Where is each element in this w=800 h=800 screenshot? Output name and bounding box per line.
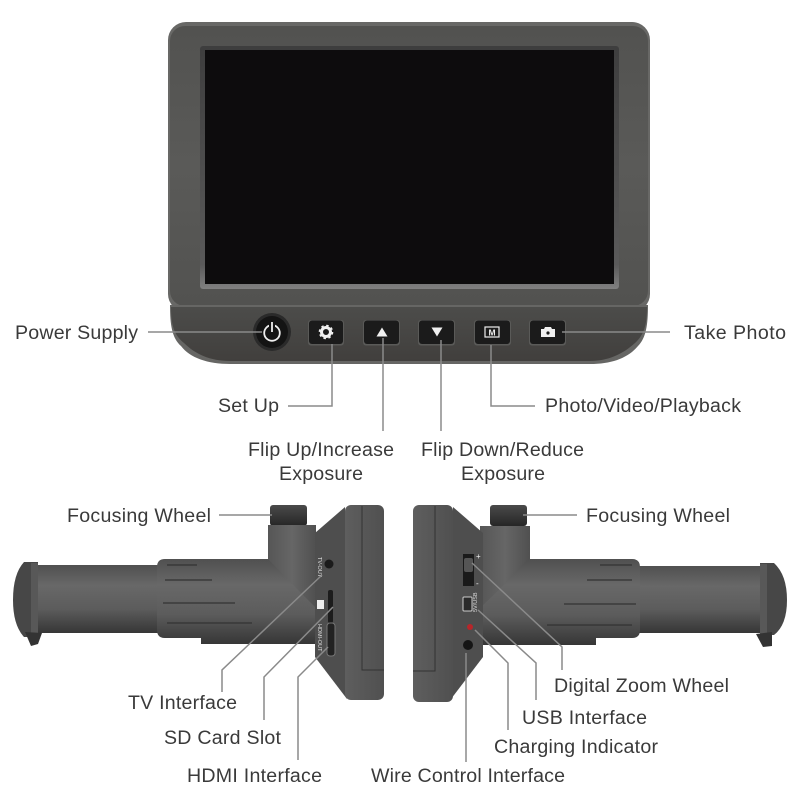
label: Charging Indicator: Charging Indicator [494,736,658,758]
minus sign: - [476,579,479,588]
HDMI port [327,623,335,656]
label: right Focusing Wheel: Focusing Wheel [586,505,730,527]
label: TV Interface: TV Interface [128,692,237,714]
cap rim highlight [760,564,767,634]
screen housing [413,505,453,702]
up button [363,320,400,346]
barrel grooves [547,565,636,625]
zoom wheel thumb [464,558,473,572]
charging indicator [467,624,473,630]
lower button panel [171,307,647,361]
power button [253,313,291,351]
USB label: 5V/USB [473,592,479,612]
cap latch [25,632,42,646]
label: HDMI Interface: HDMI Interface [187,765,322,787]
cap latch [756,632,772,647]
barrel and elbow [480,559,640,645]
screen surround [200,46,619,289]
label: Flip Down/Reduce Exposure: Flip Down/Reduce [421,439,584,461]
SD slot [328,590,333,623]
wedge back panel [315,507,347,699]
label: Photo/Video/Playback: Photo/Video/Playback [545,395,741,417]
tube [36,565,161,633]
housing seam [362,506,384,670]
monitor outer rim [168,22,650,312]
HDMI label: HDMI-OUT [316,624,322,652]
leader lines [148,332,670,762]
label: Power Supply: Power Supply [15,322,138,344]
mode button: M [488,328,496,338]
right side device view [413,505,787,702]
screen [205,50,614,284]
label: Flip Up/Increase Exposure: Flip Up/Increase [248,439,394,461]
barrel and elbow [157,559,316,644]
label: Wire Control Interface: Wire Control Interface [371,765,565,787]
label: USB Interface: USB Interface [522,707,647,729]
label: Flip Up/Increase Exposure: Exposure [279,463,363,485]
USB port [463,597,472,611]
housing seam [413,506,435,671]
zoom wheel slot [463,554,474,586]
SD icon [317,600,324,609]
settings button [308,320,344,346]
neck [480,526,530,610]
focusing wheel [490,505,527,526]
tube [638,566,762,633]
wedge back panel [451,507,483,699]
monitor bezel [170,26,648,306]
label: Flip Up/Increase Exposure [248,439,394,485]
TV port [324,560,334,568]
camera button [529,320,566,346]
lens cap [760,563,787,635]
plus sign: + [476,552,481,561]
label: left Focusing Wheel: Focusing Wheel [67,505,211,527]
label: Take Photo: Take Photo [684,322,786,344]
neck [268,525,316,610]
barrel grooves [163,565,252,623]
down button [418,320,455,346]
label: SD Card Slot: SD Card Slot [164,727,282,749]
TV port label: TV-OUT [316,557,322,578]
mode button [474,320,511,346]
screen housing [345,505,384,700]
label: Set Up: Set Up [218,395,279,417]
label: Digital Zoom Wheel: Digital Zoom Wheel [554,675,729,697]
cap rim highlight [31,563,38,636]
focusing wheel [270,505,307,526]
lower panel rim [170,305,648,364]
label: Flip Down/Reduce Exposure: Exposure [461,463,545,485]
left side device view [13,505,384,700]
monitor front view [168,22,650,364]
label: Flip Down/Reduce Exposure [421,439,584,485]
lens cap [13,562,38,637]
wire control port [463,640,473,650]
